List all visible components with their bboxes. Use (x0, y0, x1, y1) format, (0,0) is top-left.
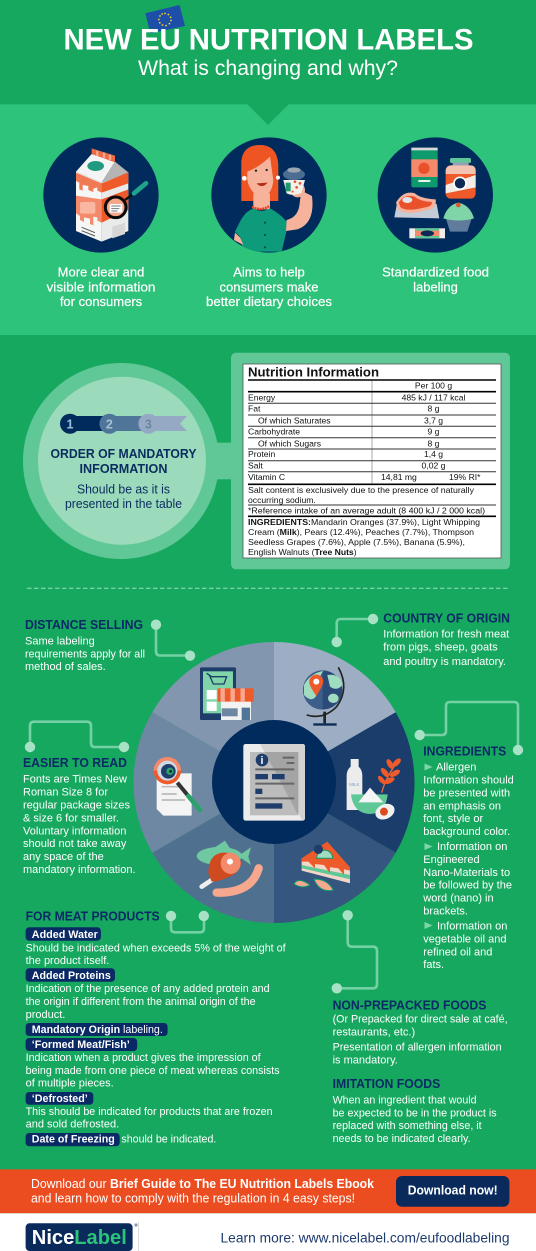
caption: dietary choices: consumers make (220, 279, 318, 294)
text block: imitation foods: IMITATION FOODS (333, 1076, 441, 1091)
ribbon: steps 1 2 3 (60, 414, 187, 434)
text block: non-prepacked foods: is mandatory. (333, 1054, 398, 1066)
can (411, 148, 438, 187)
panel: order of mandatory information (23, 363, 235, 559)
text block: ingredients: Nano-Materials to (423, 867, 510, 879)
text block: meat products: FOR MEAT PRODUCTS (26, 909, 160, 924)
text block: ingredients: Engineered (423, 854, 480, 866)
caption: standardized labeling (382, 265, 489, 294)
caption: clear information: visible information (46, 279, 156, 294)
bar (409, 228, 445, 238)
panel: nutrition table: Vitamin C (248, 472, 285, 482)
ribbon: steps 1 2 3: 2 (106, 418, 113, 432)
heading: order: ORDER OF MANDATORY (50, 447, 197, 461)
panel: nutrition table: Per 100 g (415, 381, 452, 391)
text block: imitation foods: When an ingredient that would (333, 1094, 477, 1106)
text block: ingredients: fats. (423, 959, 444, 971)
panel: nutrition table: INGREDIENTS:Mandarin Oranges (37.9%), Light Whipping (248, 517, 480, 527)
icon: woman holding a jar (211, 137, 327, 253)
text block: non-prepacked foods: restaurants, etc.) (333, 1026, 415, 1038)
connector: easier to read (25, 722, 129, 752)
text block: distance selling: Same labeling (25, 636, 95, 648)
ribbon: steps 1 2 3: 3 (145, 418, 152, 432)
panel: nutrition table: English Walnuts (Tree Nuts) (248, 547, 357, 557)
caption: standardized labeling: labeling (413, 279, 458, 294)
caption: clear information: for consumers (60, 294, 143, 309)
cupcake (443, 203, 474, 232)
text block: easier to read: Fonts are Times New (23, 774, 127, 786)
icon: label document (243, 744, 305, 821)
connector: distance selling (151, 620, 195, 661)
heading: order (50, 447, 197, 476)
panel: download banner (0, 1169, 536, 1213)
title: NEW EU NUTRITION LABELS (64, 24, 474, 56)
pill: added proteins: Added Proteins (32, 970, 111, 982)
pill: formed meat: ‘Formed Meat/Fish’ (32, 1039, 130, 1051)
text block: ingredients: background color. (423, 826, 510, 838)
text block: non-prepacked foods (333, 997, 508, 1066)
panel: footer (0, 1213, 536, 1251)
pill: defrosted: ‘Defrosted’ (32, 1093, 88, 1105)
connector: non-prepacked foods (332, 910, 377, 994)
text: should be as presented: Should be as it is (77, 482, 170, 496)
text block: meat products: of multiple pieces. (26, 1078, 114, 1090)
icon: tablet and shop (200, 667, 254, 720)
panel: nutrition table: Of which Saturates (258, 415, 331, 425)
text block: distance selling: requirements apply for all (25, 648, 145, 660)
text block: ingredients: Information should (423, 774, 514, 786)
logo: NiceLabel (26, 1222, 139, 1251)
panel: nutrition table: Of which Sugars (258, 438, 321, 448)
caption: dietary choices: better dietary choices (206, 294, 332, 309)
header pointer triangle (247, 104, 289, 125)
text block: imitation foods: be expected to be in the product is (333, 1107, 497, 1119)
panel: download banner: and learn how to comply with the regulation in 4 easy steps! (31, 1192, 355, 1206)
icon: fish, ham and sausage (197, 841, 259, 893)
icon: milk, bowl, wheat, avocado (347, 757, 402, 823)
panel: nutrition table: 19% RI* (449, 472, 481, 482)
panel: nutrition table: Fat (248, 404, 261, 414)
icon: globe (303, 667, 344, 726)
panel: nutrition table: Carbohydrate (248, 427, 300, 437)
panel: nutrition table: 8 g (428, 404, 440, 414)
caption: dietary choices (206, 265, 332, 309)
caption: standardized labeling: Standardized food (382, 265, 489, 280)
text block: meat products: being made from one piece of meat whereas consists (26, 1065, 280, 1077)
text block: ingredients: vegetable oil and (423, 933, 506, 945)
text block: easier to read: any space of the (23, 851, 104, 863)
text block: ingredients: be followed by the (423, 880, 512, 892)
icon: milk, bowl, wheat, avocado: MILK (349, 782, 359, 787)
text block: ingredients: font, style or (423, 813, 484, 825)
panel: benefits (0, 104, 536, 335)
ribbon: steps 1 2 3: 1 (67, 418, 74, 432)
text block: easier to read: Roman Size 8 for (23, 787, 108, 799)
panel: nutrition table: Seedless Grapes (7.6%), Apple (7.5%), Banana (5.9%), (248, 537, 465, 547)
text block: easier to read: should not take away (23, 838, 127, 850)
pill: mandatory origin: Mandatory Origin labeling. (32, 1024, 163, 1036)
text block: ingredients: word (nano) in (422, 893, 494, 905)
text block: imitation foods: needs to be indicated clearly. (333, 1133, 471, 1145)
text block: ingredients: INGREDIENTS (423, 743, 507, 758)
pill: date of freezing: Date of Freezing (32, 1134, 115, 1146)
subtitle: What is changing and why? (138, 56, 398, 80)
text block: non-prepacked foods: (Or Prepacked for direct sale at café, (333, 1014, 508, 1026)
text block: meat products: the origin if different from the animal origin of the (26, 996, 256, 1008)
steak (394, 193, 439, 218)
jar (446, 158, 476, 199)
panel: nutrition table: 0,02 g (422, 460, 446, 470)
panel: nutrition table: 1,4 g (424, 449, 443, 459)
text block: ingredients: brackets. (423, 905, 468, 917)
text block: distance selling: method of sales. (25, 661, 106, 673)
logo: NiceLabel: NiceLabel (32, 1227, 127, 1249)
text block: country of origin (383, 611, 510, 668)
text block: ingredients: refined oil and (423, 946, 492, 958)
panel: nutrition table: *Reference intake of an average adult (8 400 kJ / 2 000 kcal) (248, 506, 485, 516)
connector: meat products (166, 911, 209, 932)
panel: nutrition table: Nutrition Information (248, 365, 379, 380)
text block: imitation foods (333, 1076, 497, 1145)
text block: country of origin: from pigs, sheep, goats (383, 642, 498, 654)
panel: nutrition table: Cream (Milk), Pears (12.4%), Peaches (7.7%), Thompson (248, 527, 474, 537)
text block: meat products: Indication when a product gives the impression of (26, 1052, 262, 1064)
text block: distance selling (25, 617, 145, 673)
text: should be as presented (65, 482, 182, 511)
text block: easier to read (23, 755, 136, 876)
caption: clear information (46, 265, 156, 309)
icon: document under magnifier (154, 757, 200, 816)
text block: imitation foods: replaced with something else, it (333, 1120, 482, 1132)
text block: ingredients: be presented with (423, 787, 510, 799)
text block: easier to read: & size 6 for smaller. (23, 812, 119, 824)
icon: label document: i (261, 755, 264, 767)
icon: cake slice (294, 842, 350, 891)
text block: meat products: and sold defrosted. (26, 1119, 119, 1131)
button: download now (396, 1176, 509, 1207)
icon: EU flag (145, 5, 185, 33)
icon: milk carton with magnifier (43, 137, 159, 253)
panel: download banner: Download our Brief Guide to The EU Nutrition Labels Ebook (31, 1177, 374, 1191)
text block: easier to read: regular package sizes (23, 800, 131, 812)
panel: nutrition table (231, 353, 510, 569)
text block: ingredients: Information on (437, 920, 507, 932)
panel: nutrition table: occurring sodium. (248, 495, 316, 505)
chart: six-segment wheel (133, 642, 415, 923)
text block: easier to read: EASIER TO READ (23, 755, 127, 770)
text: learn more: Learn more: www.nicelabel.com/eufoodlabeling (220, 1231, 510, 1246)
panel: nutrition table: Salt content is exclusively due to the presence of naturally (248, 485, 475, 495)
text block: country of origin: Information for fresh meat (383, 629, 509, 641)
connector: ingredients (414, 702, 523, 755)
text block: country of origin: and poultry is mandatory. (383, 656, 506, 668)
pill: added water: Added Water (32, 929, 98, 941)
connector: country of origin (332, 614, 378, 647)
panel: nutrition table: Protein (248, 449, 275, 459)
text block: easier to read: mandatory information. (23, 864, 136, 876)
text block: meat products: Should be indicated when exceeds 5% of the weight of (26, 942, 287, 954)
text block: easier to read: Voluntary information (23, 825, 126, 837)
text block: non-prepacked foods: NON-PREPACKED FOODS (333, 997, 487, 1012)
caption: dietary choices: Aims to help (233, 265, 305, 280)
panel: nutrition table: 8 g (428, 438, 440, 448)
text block: meat products (26, 909, 287, 1146)
text: should be as presented: presented in the table (65, 497, 182, 511)
caption: clear information: More clear and (58, 265, 144, 280)
panel: nutrition table: 3,7 g (424, 415, 443, 425)
text block: non-prepacked foods: Presentation of allergen information (333, 1041, 502, 1053)
text block: ingredients: Allergen (436, 762, 476, 774)
text block: meat products: should be indicated. (121, 1134, 216, 1146)
text block: ingredients: Information on (437, 841, 507, 853)
text block: ingredients: an emphasis on (423, 800, 501, 812)
text block: meat products: Indication of the presence of any added protein and (26, 983, 270, 995)
panel: nutrition table: 485 kJ / 117 kcal (402, 392, 466, 402)
panel: nutrition table: 14,81 mg (381, 472, 417, 482)
panel: nutrition table: Energy (248, 392, 276, 402)
text block: distance selling: DISTANCE SELLING (25, 617, 143, 632)
text block: country of origin: COUNTRY OF ORIGIN (383, 611, 510, 626)
text block: ingredients (422, 743, 514, 971)
icon: packaged foods (378, 137, 493, 253)
panel: nutrition table: Salt (248, 460, 263, 470)
heading: order: INFORMATION (80, 462, 167, 476)
text block: meat products: This should be indicated for products that are frozen (26, 1106, 273, 1118)
panel: nutrition table: 9 g (428, 427, 440, 437)
text block: meat products: product. (26, 1009, 65, 1021)
button: download now: Download now! (408, 1184, 498, 1198)
text block: meat products: the product itself. (26, 955, 109, 967)
